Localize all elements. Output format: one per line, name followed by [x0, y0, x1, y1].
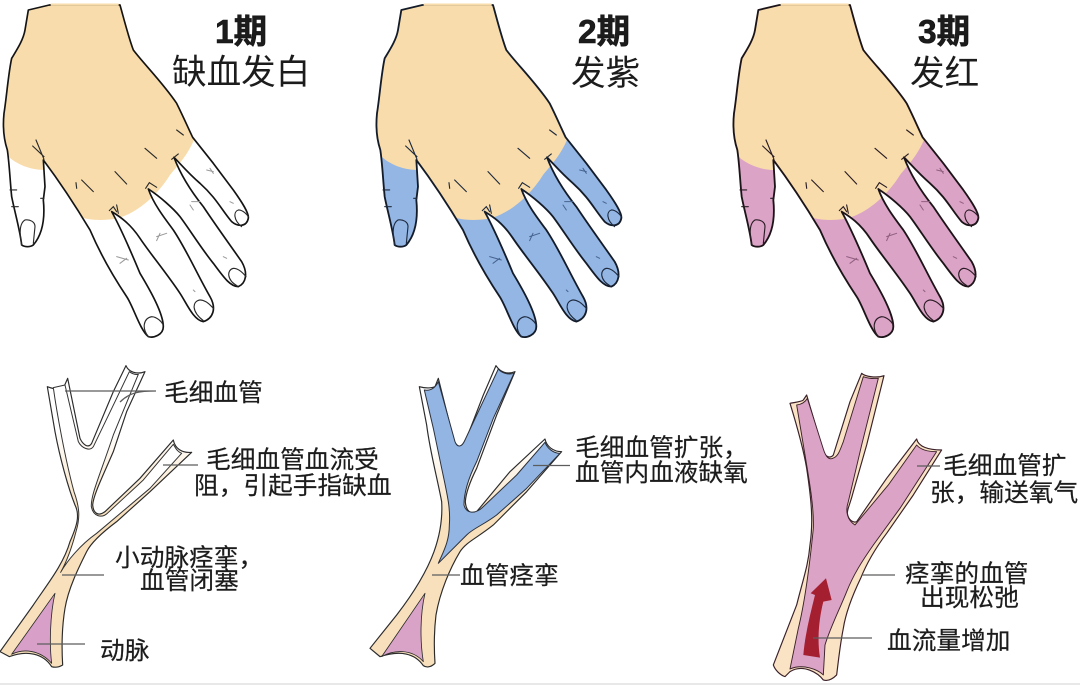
title: stage 1: 缺血发白 [172, 54, 310, 92]
labels: stage 1: 动脉 [100, 637, 150, 665]
labels: stage 3: 出现松弛 [920, 584, 1019, 612]
labels: stage 3: 血流量增加 [887, 627, 1010, 655]
labels: stage 3 [813, 452, 1078, 655]
labels: stage 1: 毛细血管血流受 [206, 446, 379, 474]
arrow: increased blood flow [803, 578, 832, 658]
vessel: stage 1 closed arteriole [0, 366, 192, 667]
labels: stage 3: 痉挛的血管 [905, 560, 1028, 588]
labels: stage 3: 毛细血管扩 [943, 452, 1066, 480]
title: stage 1 [172, 14, 310, 92]
hand: stage 2 blue fingers [373, 0, 621, 337]
labels: stage 1: 小动脉痉挛， [115, 544, 263, 572]
labels: stage 1: 阻，引起手指缺血 [194, 472, 392, 500]
labels: stage 2: 血管内血液缺氧 [575, 459, 748, 487]
vessel: stage 3 dilated pink vessel [773, 373, 942, 680]
title: stage 3: 发红 [910, 55, 979, 93]
labels: stage 1: 血管闭塞 [140, 567, 239, 595]
hand: stage 1 white fingers [0, 0, 248, 337]
labels: stage 3: 张，输送氧气 [930, 479, 1078, 507]
labels: stage 1 [37, 379, 392, 665]
labels: stage 2: 血管痉挛 [460, 562, 559, 590]
title: stage 1: 1期 [215, 14, 267, 51]
title: stage 2 [571, 14, 640, 93]
title: stage 2: 2期 [578, 14, 630, 51]
title: stage 2: 发紫 [571, 55, 640, 93]
vessel: stage 2 blue capillaries [370, 366, 562, 667]
labels: stage 2: 毛细血管扩张， [575, 434, 748, 462]
title: stage 3: 3期 [918, 14, 970, 51]
labels: stage 1: 毛细血管 [164, 379, 263, 407]
title: stage 3 [910, 14, 979, 93]
hand: stage 3 pink fingers [730, 0, 978, 337]
labels: stage 2 [432, 434, 748, 590]
